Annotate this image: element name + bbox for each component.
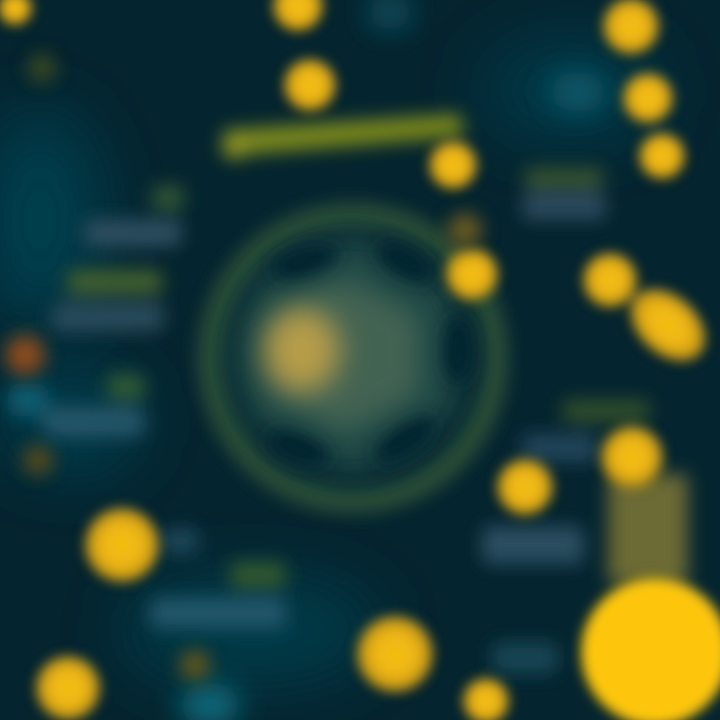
left olive heading 3 [107, 374, 145, 400]
headline bar [222, 114, 464, 159]
text block smears [8, 168, 650, 674]
left olive heading 1 [152, 185, 184, 211]
wheel ring [210, 215, 496, 501]
left label 3 [44, 408, 144, 436]
lower right label 2 [482, 526, 584, 564]
wheel dark gaps [261, 233, 473, 474]
lower left olive heading [230, 562, 286, 588]
right label [522, 192, 606, 220]
left teal block [8, 384, 48, 416]
lower right olive heading [562, 400, 650, 422]
left label 1 [84, 220, 182, 246]
wheel inner fill [232, 237, 468, 473]
large sun [581, 578, 720, 720]
tan column [608, 474, 688, 584]
dim nodes [5, 54, 482, 680]
lower left label [150, 598, 286, 628]
right label heading [524, 168, 604, 188]
lower right label 1 [522, 434, 598, 462]
side label by gold circle [162, 528, 198, 554]
central wheel [210, 215, 496, 501]
left olive heading 2 [67, 270, 163, 294]
bottom centre label [492, 642, 558, 674]
left label 2 [52, 303, 164, 331]
hexagon core [270, 275, 420, 435]
core glow [264, 308, 340, 392]
